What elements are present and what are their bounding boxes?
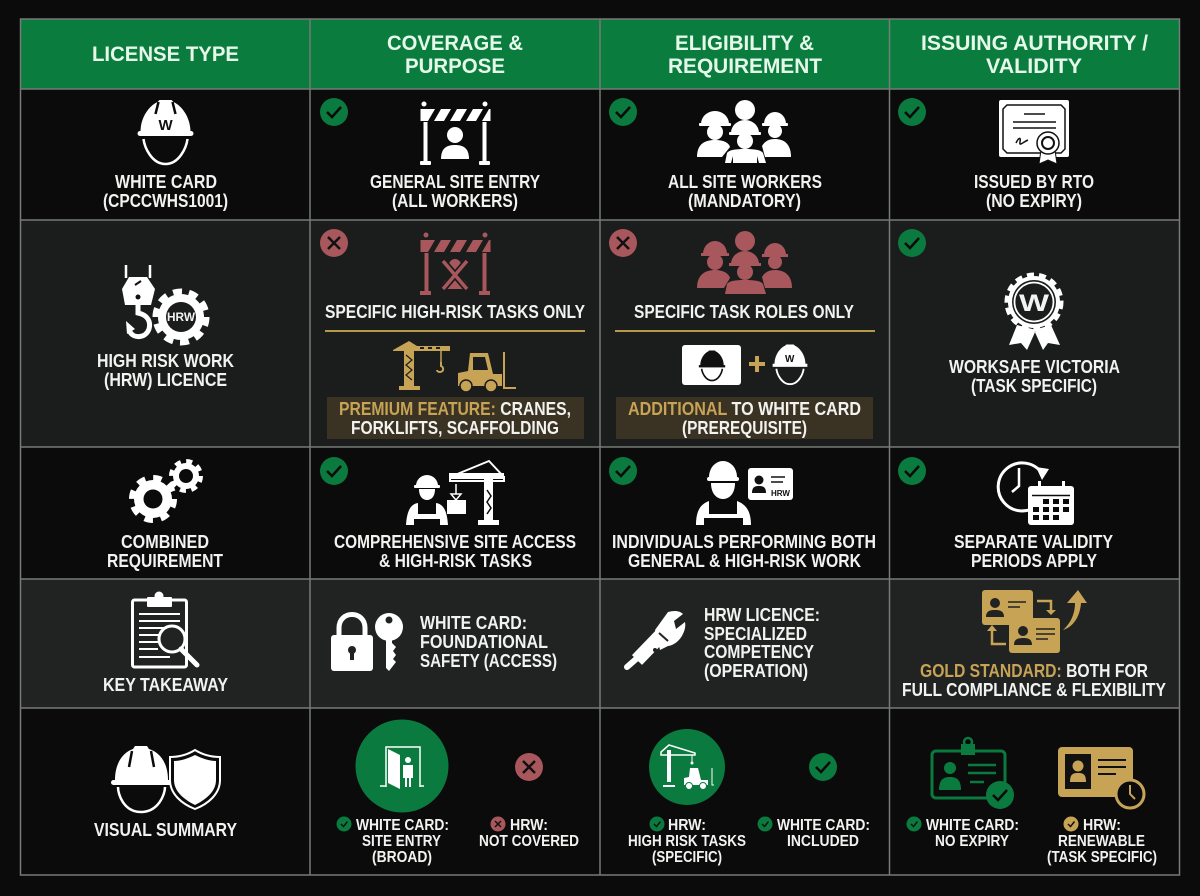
icon: clock and calendar <box>998 463 1074 525</box>
icon: gold forklift <box>458 352 516 392</box>
label: all site workers: ALL SITE WORKERS <box>668 172 822 192</box>
label: comprehensive site access: COMPREHENSIVE SITE ACCESS <box>334 532 576 552</box>
label: white card no expiry: NO EXPIRY <box>935 833 1009 850</box>
icon: red group of workers <box>697 231 792 294</box>
icon: green check <box>609 98 637 126</box>
icon: gold crane <box>393 341 450 390</box>
callout: additional to white card <box>616 397 873 439</box>
label: white card: (CPCCWHS1001) <box>103 191 228 211</box>
row: visual summary <box>94 720 1157 866</box>
label: white card no expiry <box>906 816 1019 850</box>
icon: red cross <box>609 229 637 257</box>
label: HRW renewable task specific <box>1047 816 1157 866</box>
icon: padlock and key <box>331 613 403 671</box>
icon: WorkSafe rosette <box>1007 275 1061 350</box>
heading: coverage and purpose <box>387 32 523 78</box>
label: high risk work licence <box>97 351 234 390</box>
label: white card foundational safety: SAFETY (ACCESS) <box>420 651 557 671</box>
icon: red cross <box>515 753 543 781</box>
heading: issuing authority and validity: ISSUING AUTHORITY / <box>921 32 1148 55</box>
heading: license type: LICENSE TYPE <box>92 43 239 66</box>
label: comprehensive site access <box>334 532 576 571</box>
label: HRW high risk tasks specific: HIGH RISK TASKS <box>628 833 746 850</box>
icon: green check <box>898 98 926 126</box>
callout: premium feature: FORKLIFTS, SCAFFOLDING <box>351 418 559 438</box>
label: gold standard <box>902 661 1166 700</box>
icon: green check <box>609 457 637 485</box>
label: white card site entry broad: WHITE CARD: <box>356 817 449 834</box>
label: separate validity periods: SEPARATE VALIDITY <box>954 532 1113 552</box>
label: individuals performing both <box>612 532 876 571</box>
label: specific task roles only: SPECIFIC TASK ROLES ONLY <box>634 302 854 322</box>
label: general site entry <box>370 172 540 211</box>
label: HRW licence specialized competency <box>704 605 820 681</box>
icon: green check <box>320 98 348 126</box>
icon: helmet and shield <box>111 746 220 812</box>
label: HRW licence specialized competency: SPECIALIZED <box>704 624 807 644</box>
label: key takeaway: KEY TAKEAWAY <box>103 675 228 695</box>
label: HRW licence specialized competency: (OPERATION) <box>704 661 808 681</box>
icon: green check <box>898 457 926 485</box>
label: HRW licence specialized competency: COMPETENCY <box>704 642 814 662</box>
callout: premium feature: PREMIUM FEATURE: CRANES, <box>339 399 571 419</box>
label: white card included: WHITE CARD: <box>777 817 870 834</box>
label: white card site entry broad <box>336 816 449 866</box>
label: separate validity periods <box>954 532 1113 571</box>
label: HRW high risk tasks specific <box>628 816 746 866</box>
label: individuals performing both: INDIVIDUALS PERFORMING BOTH <box>612 532 876 552</box>
header row <box>92 32 1148 78</box>
label: specific high-risk tasks only: SPECIFIC HIGH-RISK TASKS ONLY <box>325 302 585 322</box>
label: HRW high risk tasks specific: HRW: <box>668 817 706 834</box>
icon: white hard hat: W <box>158 117 174 134</box>
label: WorkSafe Victoria: (TASK SPECIFIC) <box>971 376 1097 396</box>
label: white card foundational safety: FOUNDATIONAL <box>420 632 548 652</box>
heading: issuing authority and validity <box>921 32 1148 78</box>
label: gold standard: GOLD STANDARD: BOTH FOR <box>920 661 1148 681</box>
icon: WorkSafe rosette: W <box>1019 290 1049 317</box>
icon: red site barrier <box>420 232 490 295</box>
label: white card: WHITE CARD <box>115 172 217 192</box>
label: general site entry: (ALL WORKERS) <box>392 191 518 211</box>
label: white card no expiry: WHITE CARD: <box>926 817 1019 834</box>
icon: HRW card plus white card helmets <box>682 345 807 385</box>
row: high risk work licence <box>97 229 1120 439</box>
label: HRW high risk tasks specific: (SPECIFIC) <box>652 849 722 866</box>
label: combined requirement <box>107 532 223 571</box>
label: all site workers: (MANDATORY) <box>688 191 801 211</box>
label: WorkSafe Victoria: WORKSAFE VICTORIA <box>949 357 1120 377</box>
icon: green circle with crane and forklift <box>649 729 725 805</box>
icon: worker and crane <box>406 461 504 525</box>
icon: white hard hat <box>138 100 194 164</box>
label: white card <box>103 172 228 211</box>
icon: green ID card with check <box>932 738 1014 809</box>
label: white card foundational safety <box>420 613 557 671</box>
label: comprehensive site access: & HIGH-RISK TASKS <box>379 551 532 571</box>
icon: red cross <box>320 229 348 257</box>
label: issued by RTO: (NO EXPIRY) <box>986 191 1082 211</box>
label: separate validity periods: PERIODS APPLY <box>971 551 1097 571</box>
label: all site workers <box>668 172 822 211</box>
label: white card included <box>758 816 870 850</box>
callout: additional to white card: (PREREQUISITE) <box>682 418 807 438</box>
heading: eligibility and requirement <box>668 32 822 78</box>
heading: coverage and purpose: PURPOSE <box>405 55 505 78</box>
icon: certificate with seal <box>999 100 1069 164</box>
label: HRW renewable task specific: (TASK SPECIFIC) <box>1047 849 1157 866</box>
icon: group of workers <box>697 100 791 163</box>
label: white card site entry broad: SITE ENTRY <box>362 833 441 850</box>
icon: site barrier with person <box>420 102 490 165</box>
icon: clipboard with magnifier <box>132 592 197 667</box>
row: key takeaway <box>103 590 1166 700</box>
heading: eligibility and requirement: REQUIREMENT <box>668 55 822 78</box>
icon: green check <box>809 753 837 781</box>
icon: adjustable wrench <box>627 611 685 667</box>
label: issued by RTO: ISSUED BY RTO <box>974 172 1094 192</box>
icon: HRW card plus white card helmets: W <box>785 354 795 365</box>
heading: eligibility and requirement: ELIGIBILITY & <box>675 32 814 55</box>
callout: premium feature <box>327 397 584 439</box>
label: HRW renewable task specific: RENEWABLE <box>1058 833 1145 850</box>
icon: worker with HRW card: HRW <box>771 489 790 498</box>
label: white card site entry broad: (BROAD) <box>372 849 432 866</box>
label: HRW not covered: NOT COVERED <box>479 833 579 850</box>
label: HRW renewable task specific: HRW: <box>1083 817 1121 834</box>
label: visual summary: VISUAL SUMMARY <box>94 820 237 840</box>
label: HRW not covered <box>479 816 579 850</box>
label: high risk work licence: HIGH RISK WORK <box>97 351 234 371</box>
icon: green check <box>320 457 348 485</box>
label: general site entry: GENERAL SITE ENTRY <box>370 172 540 192</box>
label: issued by RTO <box>974 172 1094 211</box>
icon: crane hook and HRW gear: HRW <box>167 310 196 324</box>
icon: gold ID card with clock <box>1058 747 1144 808</box>
heading: coverage and purpose: COVERAGE & <box>387 32 523 55</box>
heading: issuing authority and validity: VALIDITY <box>986 55 1082 78</box>
label: white card included: INCLUDED <box>787 833 859 850</box>
icon: green circle with open door <box>356 720 448 812</box>
label: WorkSafe Victoria <box>949 357 1120 396</box>
callout: additional to white card: ADDITIONAL TO WHITE CARD <box>628 399 861 419</box>
label: HRW not covered: HRW: <box>510 817 548 834</box>
icon: green check <box>898 229 926 257</box>
icon: two gears <box>132 462 200 520</box>
label: combined requirement: COMBINED <box>121 532 209 552</box>
label: high risk work licence: (HRW) LICENCE <box>104 370 227 390</box>
row: white card <box>103 98 1094 211</box>
label: white card foundational safety: WHITE CARD: <box>420 613 527 633</box>
label: individuals performing both: GENERAL & HIGH-RISK WORK <box>628 551 861 571</box>
icon: crane hook and HRW gear <box>122 265 206 342</box>
label: HRW licence specialized competency: HRW LICENCE: <box>704 605 820 625</box>
label: gold standard: FULL COMPLIANCE & FLEXIBILITY <box>902 680 1166 700</box>
label: combined requirement: REQUIREMENT <box>107 551 223 571</box>
row: combined requirement <box>107 457 1113 571</box>
icon: gold cards and arrows <box>982 590 1087 653</box>
icon: worker with HRW card <box>696 461 793 525</box>
